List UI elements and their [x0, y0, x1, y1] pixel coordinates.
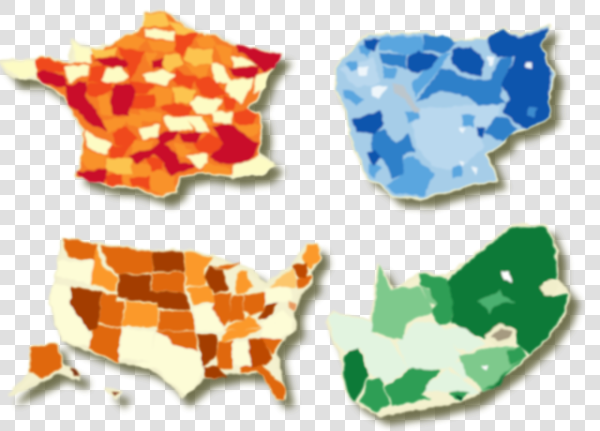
France departments: [3, 12, 282, 197]
Cambodia drop shadow: [344, 35, 562, 206]
France drop shadow: [9, 20, 290, 205]
South Africa cream bevel outline: [327, 225, 570, 415]
South Africa municipalities: [328, 227, 568, 412]
USA states: [30, 239, 320, 398]
South Africa drop shadow: [335, 234, 578, 424]
USA cream bevel outline: [10, 239, 320, 398]
map: France, red-orange departments: [0, 12, 290, 205]
map: USA, orange states: [10, 239, 328, 407]
Cambodia districts: [335, 27, 553, 198]
USA drop shadow: [18, 248, 328, 407]
map: South Africa, green municipalities: [327, 225, 578, 424]
map: Cambodia, blue districts: [335, 27, 562, 206]
Cambodia cream bevel outline: [335, 27, 553, 198]
France cream bevel outline: [0, 12, 282, 197]
